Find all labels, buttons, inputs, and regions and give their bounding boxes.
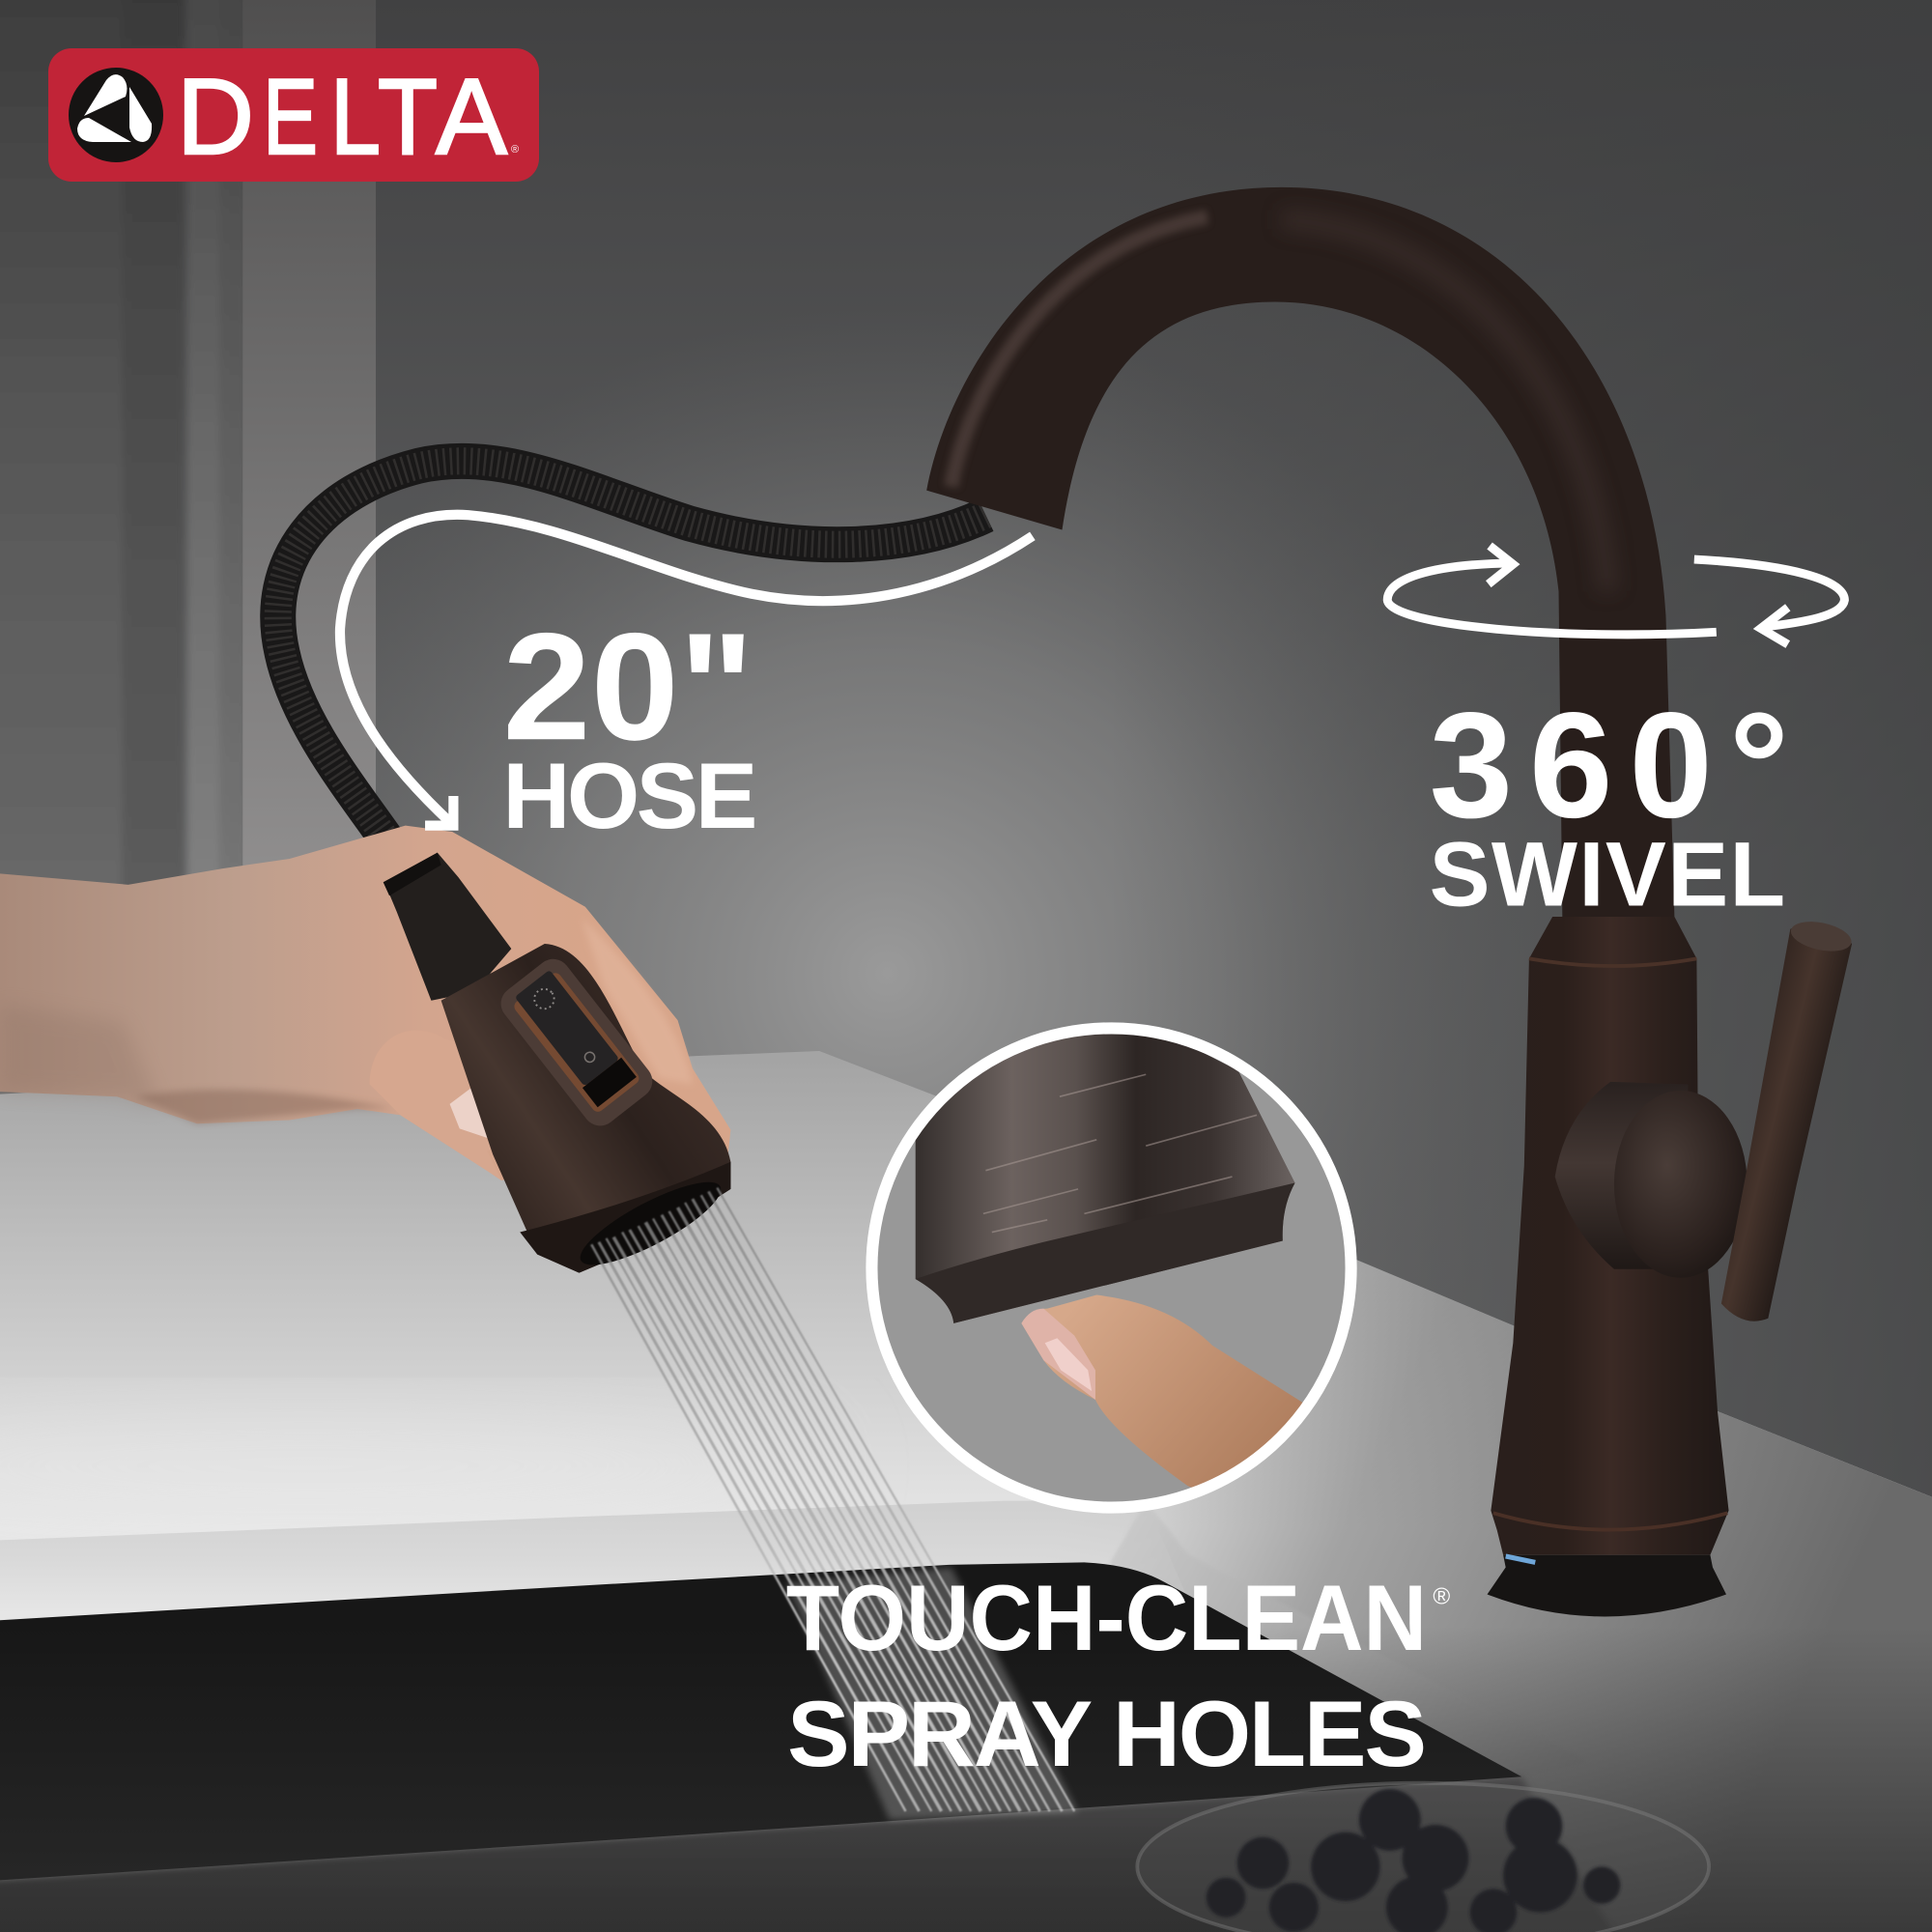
touch-clean label: SPRAY HOLES [787,1681,1427,1786]
water spray [591,1188,1078,1820]
swivel label: 360 degrees [1430,681,1789,925]
hose length label: 20 inch [502,601,757,848]
logo wordmark: E [263,57,318,177]
faucet spout shading [952,216,1608,591]
touch-clean callout circle [871,1005,1351,1508]
faucet spout [926,187,1674,918]
swivel label: 360 degrees: SWIVEL [1430,824,1785,925]
sprayer head [384,853,730,1279]
swivel arrows [1387,546,1844,644]
hose length arrow [340,515,1033,826]
logo wordmark [177,57,507,177]
touch-clean label: ® [1433,1584,1450,1610]
touch-clean label: TOUCH-CLEAN [786,1565,1427,1670]
sink basin [0,1562,1521,1880]
hand [0,826,730,1180]
logo wordmark: L [330,57,381,177]
bowl of blueberries [1137,1783,1709,1932]
logo wordmark: T [378,57,438,177]
hose length label: 20 inch: HOSE [502,743,757,848]
logo wordmark: A [436,57,507,177]
background: left wall columns [0,0,376,1109]
spray head close-up [916,1005,1306,1503]
bottom shading [0,1627,1932,1932]
touch-clean label [786,1565,1450,1786]
logo wordmark: D [177,57,254,177]
floor strip below sink [0,1776,1651,1932]
faucet handle [1555,917,1854,1321]
Delta logo: ® [511,144,519,156]
swivel label: 360 degrees: 360° [1430,681,1789,849]
background: marble countertop [0,1047,1932,1932]
hose length label: 20 inch: 20" [502,601,754,772]
hose [278,461,985,868]
spray switch [494,952,660,1133]
faucet body [1488,917,1729,1616]
Delta logo [48,48,539,182]
thumb [370,1031,523,1180]
logo emblem [69,68,163,162]
